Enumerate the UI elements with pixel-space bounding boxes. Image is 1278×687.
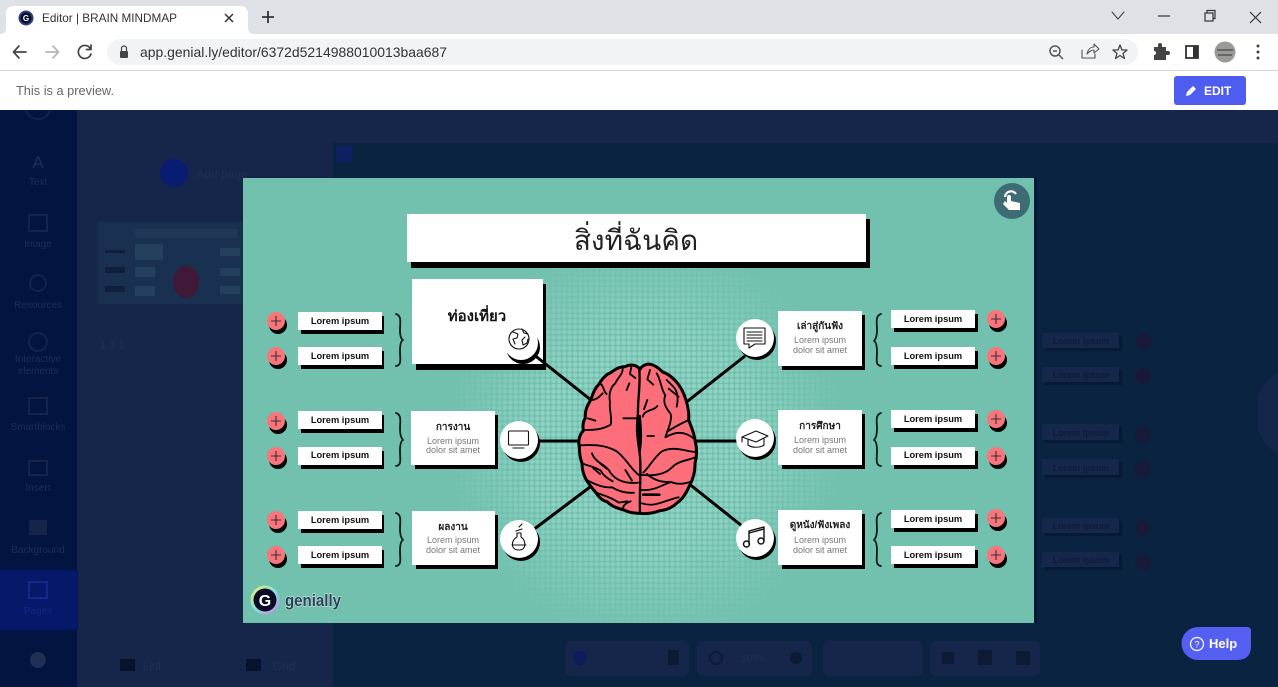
panel: travel card [412, 279, 546, 370]
travel connector line [533, 354, 596, 404]
dimmed off-canvas buttons: Lorem ipsum [1053, 555, 1109, 565]
label button: Lorem ipsum [904, 314, 962, 324]
dimmed pages panel: List [143, 659, 162, 673]
plus button [987, 509, 1007, 531]
plus button [267, 347, 287, 369]
connector lines [533, 356, 745, 530]
dimmed off-canvas buttons [1042, 333, 1278, 570]
dimmed sidebar: Insert [25, 483, 51, 494]
panel: portfolio card: Lorem ipsum [427, 535, 479, 545]
plus button [987, 447, 1007, 469]
left row 3 items [267, 511, 403, 568]
dimmed sidebar: A [32, 153, 44, 172]
label button: Lorem ipsum [904, 414, 962, 424]
label button: Lorem ipsum [904, 351, 962, 361]
dimmed sidebar: Text [29, 177, 47, 188]
title: สิ่งที่ฉันคิด [574, 221, 698, 256]
panel: travel card: ท่องเที่ยว [448, 305, 506, 325]
icon: laptop [500, 421, 540, 462]
active tab: G [23, 14, 29, 23]
plus button [987, 410, 1007, 432]
icon: flask [500, 520, 540, 561]
plus button [987, 347, 1007, 369]
dimmed sidebar: Interactive [15, 354, 62, 365]
icon: globe [504, 326, 540, 364]
dimmed pages panel: Add page [196, 167, 248, 181]
dimmed off-canvas buttons: Lorem ipsum [1053, 521, 1109, 531]
dimmed sidebar: Smartblocks [10, 422, 66, 433]
panel: education card [778, 410, 865, 469]
dimmed sidebar: Image [24, 239, 52, 250]
brace [396, 314, 403, 366]
dimmed pages panel: Grid [273, 659, 295, 673]
panel: movies and music card [778, 510, 865, 569]
dimmed pages panel: 1 1 1 [100, 339, 124, 351]
icon: interactive hand badge [994, 183, 1030, 219]
panel: work card [411, 411, 498, 469]
label button: Lorem ipsum [311, 450, 369, 460]
plus button [987, 310, 1007, 332]
browser toolbar [0, 34, 1278, 71]
brace [874, 314, 881, 366]
genially logo [250, 586, 341, 614]
panel: work card: การงาน [436, 422, 470, 433]
dimmed off-canvas buttons: Lorem ipsum [1053, 336, 1109, 346]
icon: music note [736, 519, 776, 560]
panel: slide canvas [243, 178, 1034, 623]
preview bar: This is a preview. [16, 83, 114, 98]
brain illustration [579, 364, 696, 514]
genially logo: genially [285, 591, 341, 610]
right row 1 items [874, 310, 1007, 369]
brace [874, 413, 881, 466]
label button: Lorem ipsum [311, 415, 369, 425]
title [407, 214, 870, 268]
plus button [987, 546, 1007, 568]
active tab: Editor | BRAIN MINDMAP [42, 11, 177, 25]
panel: work card: dolor sit amet [426, 445, 481, 455]
dimmed bottom toolbar: 100% [741, 654, 767, 665]
panel: education card: การศึกษา [799, 420, 841, 432]
preview bar [0, 71, 1278, 110]
panel: portfolio card: ผลงาน [438, 522, 468, 533]
dimmed pages panel [97, 159, 295, 673]
plus button [267, 511, 287, 533]
dimmed sidebar [0, 93, 78, 687]
dimmed sidebar: Resources [14, 300, 62, 311]
label button: Lorem ipsum [904, 514, 962, 524]
icon: graduation cap [736, 419, 776, 460]
dimmed sidebar: Pages [24, 606, 52, 617]
plus button [267, 447, 287, 469]
panel: story card [778, 311, 865, 370]
brace [396, 413, 403, 466]
dimmed sidebar: elements [18, 366, 58, 377]
browser toolbar: app.genial.ly/editor/6372d5214988010013baa687 [140, 44, 447, 60]
genially logo: G [259, 593, 271, 610]
dimmed off-canvas buttons: Lorem ipsum [1053, 463, 1109, 473]
dimmed sidebar: Background [11, 545, 65, 556]
plus button [267, 412, 287, 434]
panel: education card: Lorem ipsum [794, 435, 846, 445]
panel: story card: dolor sit amet [793, 345, 848, 355]
panel: story card: Lorem ipsum [794, 335, 846, 345]
dimmed bottom toolbar [565, 641, 1040, 676]
brace [396, 513, 403, 566]
edit button [1174, 76, 1246, 105]
panel: education card: dolor sit amet [793, 445, 848, 455]
plus button [267, 546, 287, 568]
panel: work card: Lorem ipsum [427, 436, 479, 446]
panel: movies and music card: dolor sit amet [793, 545, 848, 555]
help button [1182, 627, 1251, 660]
left row 2 items [267, 411, 403, 469]
panel: movies and music card: ดูหนัง/ฟังเพลง [790, 519, 850, 532]
dimmed off-canvas buttons: Lorem ipsum [1053, 428, 1109, 438]
label button: Lorem ipsum [311, 316, 369, 326]
icon: speech bubble [736, 319, 776, 360]
left row 1 items [267, 312, 403, 369]
help button: Help [1209, 636, 1237, 651]
label button: Lorem ipsum [904, 450, 962, 460]
plus button [267, 312, 287, 334]
label button: Lorem ipsum [311, 515, 369, 525]
panel: story card: เล่าสู่กันฟัง [797, 320, 843, 333]
panel: movies and music card: Lorem ipsum [794, 535, 846, 545]
brace [874, 513, 881, 566]
panel: portfolio card [412, 511, 498, 569]
right row 3 items [874, 509, 1007, 568]
label button: Lorem ipsum [904, 550, 962, 560]
active tab [0, 6, 254, 34]
help button: ? [1194, 640, 1200, 650]
browser tab strip [0, 0, 1278, 34]
dimmed flag marker [336, 146, 352, 162]
right row 2 items [874, 410, 1007, 469]
panel: portfolio card: dolor sit amet [426, 545, 481, 555]
dimmed off-canvas buttons: Lorem ipsum [1053, 370, 1109, 380]
label button: Lorem ipsum [311, 550, 369, 560]
label button: Lorem ipsum [311, 351, 369, 361]
edit button: EDIT [1204, 84, 1232, 98]
